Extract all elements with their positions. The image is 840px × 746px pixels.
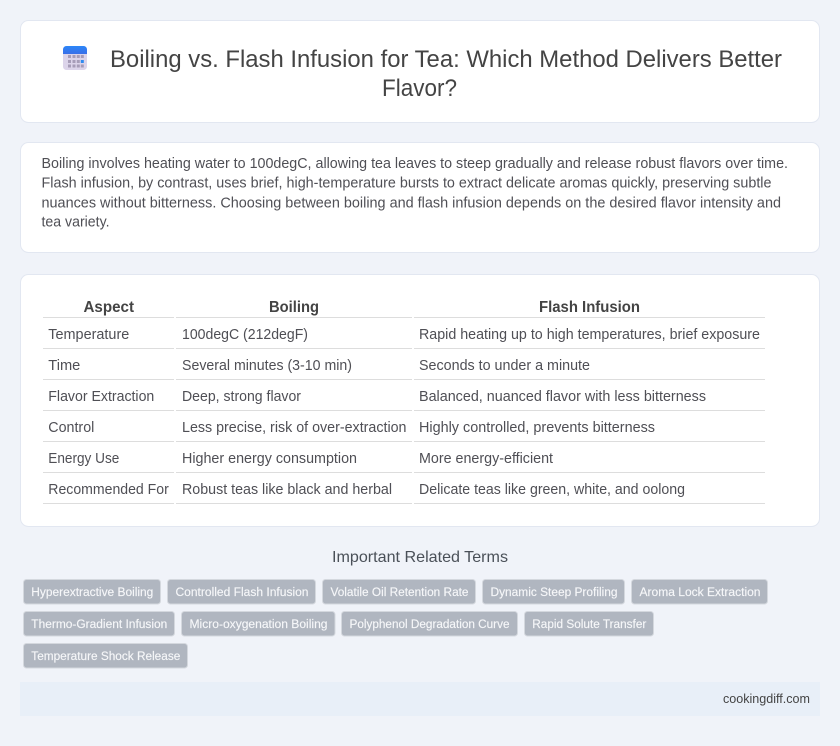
title bbox=[110, 46, 782, 102]
table row: temperature: 100degC (212degF) bbox=[182, 327, 308, 343]
table row: recommended for: Delicate teas like green, white, and oolong bbox=[419, 482, 685, 498]
table row: energy use: Energy Use bbox=[48, 451, 119, 467]
tag: Micro-oxygenation Boiling bbox=[190, 617, 328, 631]
table row: energy use bbox=[48, 451, 553, 467]
tag: Controlled Flash Infusion bbox=[176, 585, 309, 599]
tag: Aroma Lock Extraction bbox=[640, 585, 761, 599]
tag bbox=[24, 644, 188, 668]
table row: recommended for: Recommended For bbox=[48, 482, 169, 498]
text block: introduction paragraph: nuances without bitterness. Choosing between boiling and flash infusion depends on the desired flavor intensity and bbox=[42, 196, 781, 212]
table row: temperature: Rapid heating up to high temperatures, brief exposure bbox=[419, 327, 760, 343]
tag bbox=[182, 612, 335, 636]
icon: calendar bbox=[63, 46, 87, 70]
table row: time: Several minutes (3-10 min) bbox=[182, 358, 352, 374]
tag bbox=[482, 580, 624, 604]
text block: introduction paragraph: tea variety. bbox=[42, 214, 110, 230]
table row: energy use: More energy-efficient bbox=[419, 451, 553, 467]
text block: introduction paragraph: Flash infusion, by contrast, uses brief, high-temperature bursts to extract delicate aromas quickly, preserving subtle bbox=[42, 176, 772, 192]
tag bbox=[24, 612, 174, 636]
tag bbox=[342, 612, 518, 636]
table row: control bbox=[48, 420, 655, 436]
text block: introduction paragraph: Boiling involves heating water to 100degC, allowing tea leaves to steep gradually and release robust flavors over time. bbox=[42, 156, 788, 172]
tag bbox=[24, 580, 160, 604]
panel: introduction bbox=[20, 142, 820, 252]
table row: energy use: Higher energy consumption bbox=[182, 451, 357, 467]
table header bbox=[84, 299, 640, 316]
table row: flavor extraction: Deep, strong flavor bbox=[182, 389, 301, 405]
tag: Temperature Shock Release bbox=[31, 649, 180, 663]
table row: time: Seconds to under a minute bbox=[419, 358, 590, 374]
tag bbox=[322, 580, 476, 604]
panel: title card bbox=[20, 20, 820, 122]
table row: temperature bbox=[48, 327, 760, 343]
footer bbox=[20, 682, 820, 716]
table row: time bbox=[48, 358, 590, 374]
table header: Flash Infusion bbox=[539, 299, 640, 316]
table row: recommended for bbox=[48, 482, 685, 498]
table row: flavor extraction: Balanced, nuanced flavor with less bitterness bbox=[419, 389, 706, 405]
tag: Rapid Solute Transfer bbox=[532, 617, 646, 631]
tag: Hyperextractive Boiling bbox=[31, 585, 153, 599]
table row: recommended for: Robust teas like black and herbal bbox=[182, 482, 392, 498]
tag: Polyphenol Degradation Curve bbox=[350, 617, 510, 631]
tag bbox=[168, 580, 316, 604]
tag: Dynamic Steep Profiling bbox=[490, 585, 618, 599]
tag bbox=[632, 580, 768, 604]
tag: Thermo-Gradient Infusion bbox=[31, 617, 167, 631]
heading: important related terms: Important Related Terms bbox=[332, 549, 508, 566]
table row: time: Time bbox=[48, 358, 80, 374]
panel: comparison table bbox=[20, 274, 820, 526]
table row: flavor extraction: Flavor Extraction bbox=[48, 389, 154, 405]
table row: flavor extraction bbox=[48, 389, 706, 405]
table row: control: Highly controlled, prevents bitterness bbox=[419, 420, 655, 436]
title: Flavor? bbox=[382, 75, 457, 102]
table header: Aspect bbox=[84, 299, 134, 316]
table row: control: Control bbox=[48, 420, 94, 436]
table row: control: Less precise, risk of over-extraction bbox=[182, 420, 406, 436]
table header: Boiling bbox=[269, 299, 319, 316]
table row: temperature: Temperature bbox=[48, 327, 129, 343]
title: Boiling vs. Flash Infusion for Tea: Which Method Delivers Better bbox=[110, 46, 782, 73]
tag bbox=[524, 612, 654, 636]
footer: cookingdiff.com bbox=[723, 691, 810, 706]
tag: Volatile Oil Retention Rate bbox=[330, 585, 469, 599]
tag group: related terms bbox=[24, 580, 768, 668]
text block: introduction paragraph bbox=[42, 156, 788, 230]
